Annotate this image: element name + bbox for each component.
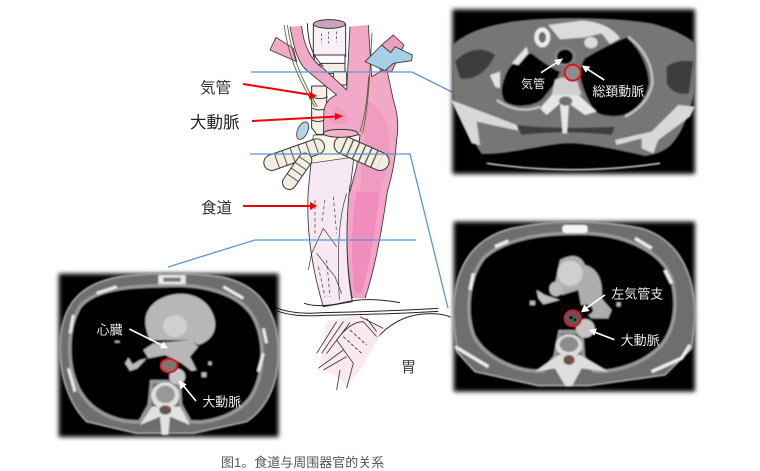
vertebra (151, 382, 179, 409)
trachea (312, 20, 347, 134)
torso (60, 273, 278, 433)
descending aorta (347, 185, 388, 298)
lower anatomy: esophagus and stomach (275, 157, 451, 390)
left bronchi (272, 147, 317, 183)
lungs (469, 233, 675, 371)
blue veins (294, 45, 412, 141)
connector line to lower CT (168, 240, 416, 267)
rib highlights (455, 238, 690, 372)
arrow: trachea (243, 84, 317, 99)
esophagus marker (565, 310, 581, 326)
label: common carotid: 総頚動脈 (592, 84, 644, 99)
darker soft tissue (455, 50, 693, 135)
arrow: left bronchus (581, 295, 605, 312)
label: heart: 心臓 (97, 322, 123, 337)
caption: 图1。食道与周围器官的关系 (221, 455, 384, 470)
CT table (487, 163, 660, 170)
esophagus marker (161, 359, 177, 372)
arrow: carotid (582, 65, 604, 80)
anatomical illustration (270, 20, 451, 390)
label: aorta: 大動脈 (202, 395, 241, 410)
diaphragm (275, 300, 451, 337)
label: left bronchus: 左気管支 (611, 287, 663, 302)
great vessels (555, 256, 612, 318)
label: esophagus: 食道 (201, 199, 232, 217)
label: stomach: 胃 (401, 359, 416, 376)
sternum (158, 275, 186, 284)
upper anatomy: trachea, aorta, bronchi (270, 20, 412, 192)
arrow: aorta (252, 113, 343, 121)
lungs (502, 37, 649, 116)
arrow: heart (129, 329, 168, 348)
sternum (562, 225, 588, 233)
lungs (70, 285, 262, 422)
label: trachea: 気管 (200, 79, 231, 97)
label: aorta: 大動脈 (621, 333, 660, 348)
panel: upper CT scan (451, 9, 696, 174)
heart (145, 294, 215, 345)
carina (310, 135, 360, 163)
panel: lower CT scan (59, 273, 279, 437)
panel: middle CT scan (453, 222, 695, 392)
bones (548, 21, 620, 44)
aortic arch and branches (270, 23, 404, 192)
right bronchus (343, 145, 380, 161)
arrow: esophagus (243, 202, 317, 210)
label: trachea: 気管 (521, 76, 545, 91)
rib highlights (68, 287, 267, 392)
esophagus (308, 157, 354, 307)
vertebra (552, 77, 582, 95)
connector line to upper CT (251, 72, 452, 92)
mediastinum and trachea (555, 47, 575, 66)
label: aorta: 大動脈 (190, 113, 240, 132)
vertebra (556, 334, 582, 357)
torso (452, 18, 696, 156)
esophagus marker (565, 65, 581, 81)
connector line to middle CT (250, 154, 448, 308)
arrow: trachea (541, 58, 563, 73)
arch base ellipse (323, 129, 358, 137)
arrow: aorta (589, 328, 614, 340)
stomach folds (317, 315, 383, 390)
torso (453, 222, 695, 386)
arrow: aorta (179, 380, 196, 401)
